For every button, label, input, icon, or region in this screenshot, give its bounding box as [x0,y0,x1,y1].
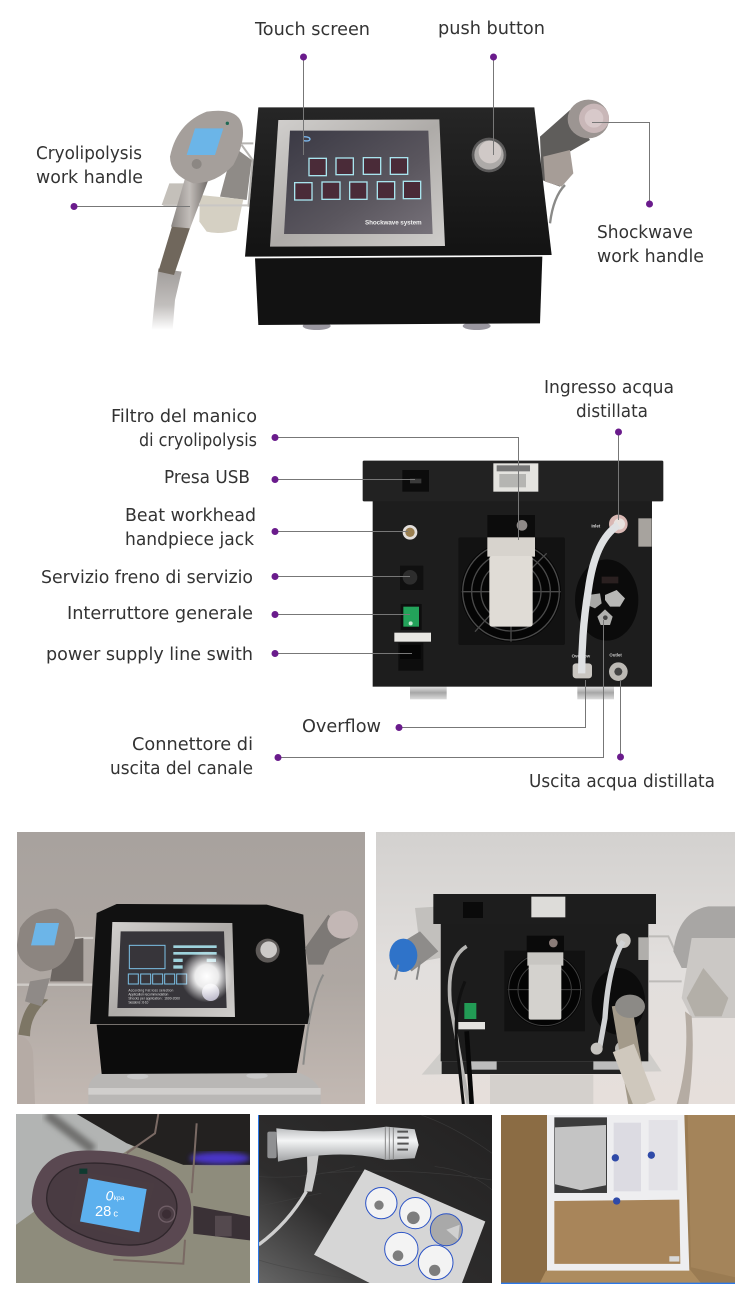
label: ingresso acqua distillata: distillata [576,402,648,422]
label: beat workhead handpiece jack: handpiece jack [125,530,255,550]
device: front machine illustration [245,100,609,330]
label: uscita acqua distillata: Uscita acqua distillata [529,772,715,792]
inlet fitting [591,515,628,533]
label: push button [438,19,545,155]
metal bezel [270,119,445,247]
panel: rear view of machine [363,461,663,699]
icon: cryolipolysis work handle [152,111,253,330]
rear body [373,500,652,687]
silicone tube [582,525,618,673]
label: connettore di uscita del canale: uscita del canale [110,759,253,779]
top housing [363,461,663,501]
photo: handle display close-up: 28 [95,1204,111,1220]
lower body [255,257,542,325]
label: connettore di uscita del canale: Connettore di [132,735,253,755]
handpiece jack [403,525,417,540]
label: servizio freno di servizio: Servizio freno di servizio [41,568,253,588]
label: power supply line switch [46,645,412,665]
photo: machine front on stand [17,832,365,1104]
label: servizio freno di servizio [41,568,410,588]
label: beat workhead handpiece jack: Beat workhead [125,506,256,526]
label: shockwave work handle [592,122,704,267]
photo: machine front on stand: Application recommendation [128,992,168,996]
icon: foot left [303,322,331,330]
label: cryolipolysis work handle: work handle [36,168,143,188]
power socket [398,643,423,671]
label: presa usb: Presa USB [164,468,250,488]
photo: machine front on stand: According Fat loss selection [128,988,173,992]
label: ingresso acqua distillata: Ingresso acqua [544,378,674,398]
label: touch screen: Touch screen [254,20,370,40]
label: cryolipolysis work handle: Cryolipolysis [36,144,142,164]
photo: handle display close-up: c [113,1208,118,1218]
label: overflow [302,680,586,737]
label: cryolipolysis work handle [36,144,190,210]
fan and grill [458,537,565,645]
label: touch screen [254,20,370,155]
photo: packing box contents [501,1115,735,1284]
label: overflow: Overflow [302,717,381,737]
brand tag [638,518,652,547]
icon: feet [410,686,614,699]
label: power supply line switch: power supply line swith [46,645,253,665]
label: presa usb [164,468,415,488]
power label [394,633,431,642]
green main switch [401,604,422,630]
touch screen display: Shockwave system [365,219,422,226]
overflow fitting: Overflow [572,653,591,658]
label: ingresso acqua distillata [544,378,674,520]
pump port assembly [575,559,638,641]
icon: foot right [463,322,491,330]
photo: machine front on stand: Shocks per application : 1600-2000 [128,996,180,1000]
label: uscita acqua distillata [529,680,715,792]
push button control [472,138,506,172]
top panel [245,107,552,257]
label: interruttore generale [67,604,410,624]
icon: shockwave work handle [540,100,609,223]
photo: shockwave handpiece with transmitters [258,1115,492,1283]
photo: machine front on stand: Sessions : 6-10 [128,1000,148,1004]
panel: front view of machine [152,100,609,330]
photo: handle display close-up [16,1114,250,1283]
photo: machine rear with handles [376,832,735,1104]
label: shockwave work handle: Shockwave [597,223,693,243]
touch screen display [284,131,433,234]
label: interruttore generale: Interruttore generale [67,604,253,624]
label: shockwave work handle: work handle [597,247,704,267]
barcode label [493,463,538,492]
filter bottle [487,515,535,627]
overflow fitting [572,653,592,678]
label: beat workhead handpiece jack [125,506,408,550]
photo: handle display close-up: kpa [114,1195,125,1202]
label: filtro del manico [111,407,518,540]
label: filtro del manico: di cryolipolysis [139,431,257,451]
service connector [400,566,423,590]
label: filtro del manico: Filtro del manico [111,407,257,427]
label: connettore di uscita del canale [110,620,604,779]
photo: handle display close-up: 0 [106,1188,114,1203]
device: rear machine illustration [363,461,663,699]
outlet fitting: Outlet [609,653,622,658]
usb socket [402,470,429,492]
label: push button: push button [438,19,545,39]
outlet fitting [609,653,628,681]
inlet fitting: Inlet [591,524,601,529]
